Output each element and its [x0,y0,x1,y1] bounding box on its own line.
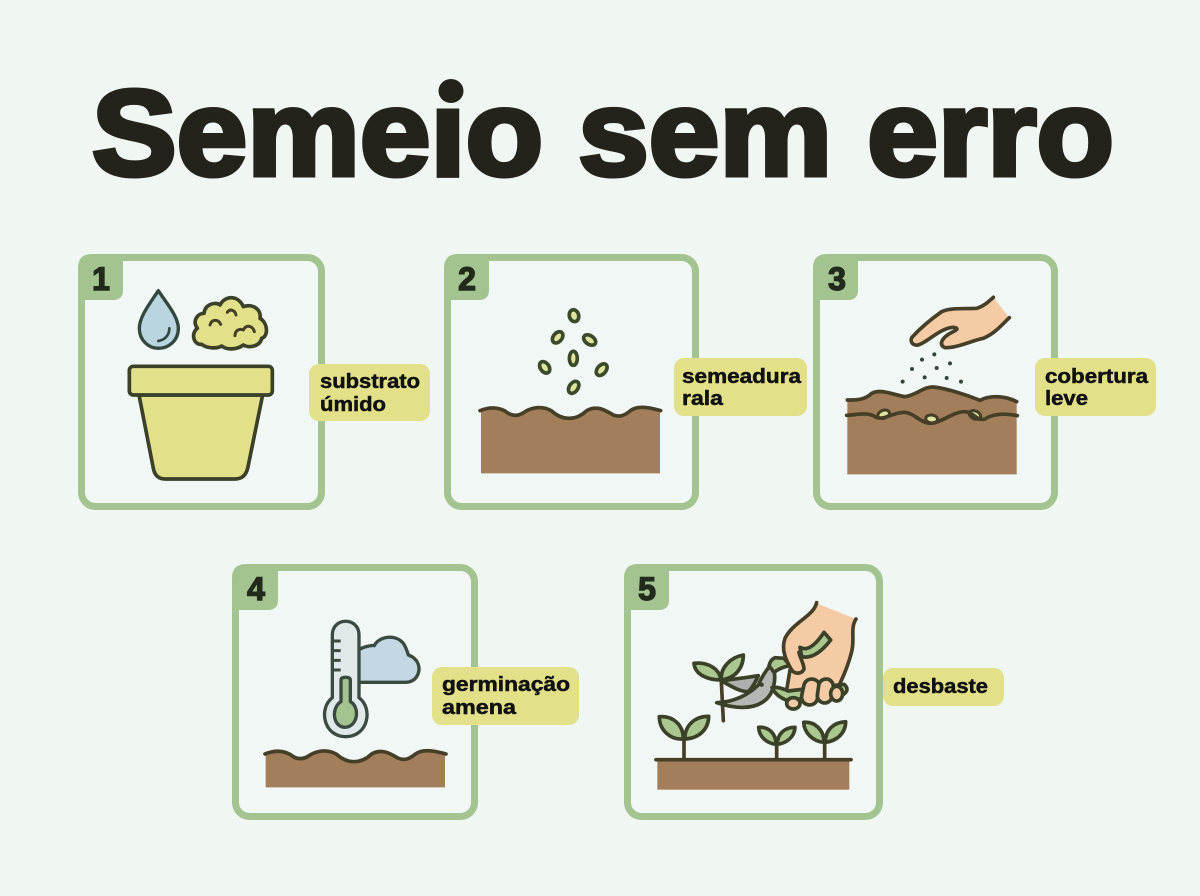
label: cobertura leve: cobertura [1045,366,1149,388]
icon: hand sprinkling [911,297,1009,348]
icon: soil strip [265,751,446,787]
label: germinação amena [432,667,579,725]
card frame 5 [628,568,880,816]
title: Semeio sem erro [92,65,1114,201]
icon: moist substrate clump [194,298,266,349]
panel: step 1 substrato úmido [78,254,430,506]
icon: cloud [358,637,419,682]
label: cobertura leve: leve [1045,388,1088,410]
icon: falling seeds [537,309,609,395]
number badge 4 [232,564,278,610]
card frame 2 [448,258,696,506]
label: germinação amena: amena [442,697,517,719]
label: germinação amena: germinação [442,674,570,696]
card frame 4 [236,568,474,816]
icon: falling soil particles [901,352,963,384]
number badge 3 [813,254,858,300]
icon: soil bed [480,407,661,473]
card frame 1 [82,258,322,506]
label: desbaste [883,668,1004,706]
icon: water drop [139,291,178,348]
number badge 2 [444,254,489,300]
number badge 1 [78,254,123,300]
label: substrato úmido: úmido [320,394,386,416]
number badge 1: 1 [92,261,110,297]
number badge 5: 5 [638,571,656,607]
number badge 3: 3 [828,261,846,297]
panel: step 3 cobertura leve [813,254,1156,506]
panel: step 4 germinação amena [232,564,579,816]
icon: flower pot [129,366,272,479]
number badge 5 [624,564,669,610]
label: desbaste: desbaste [893,676,988,698]
icon: soil with covered seeds [847,387,1017,474]
panel: step 5 desbaste [624,564,1004,816]
label: semeadura rala [674,358,807,416]
icon: thermometer [325,621,367,737]
number badge 2: 2 [458,261,476,297]
icon: soil bed with seedlings [656,716,851,790]
label: substrato úmido: substrato [320,371,420,393]
number badge 4: 4 [247,571,265,607]
label: substrato úmido [309,364,430,421]
label: semeadura rala: rala [682,388,724,410]
label: cobertura leve [1035,358,1156,416]
label: semeadura rala: semeadura [682,366,802,388]
card frame 3 [816,258,1054,506]
panel: step 2 semeadura rala [444,254,807,506]
icon: hand with pruning shears [717,603,856,709]
icon: thinned seedling [694,655,743,721]
